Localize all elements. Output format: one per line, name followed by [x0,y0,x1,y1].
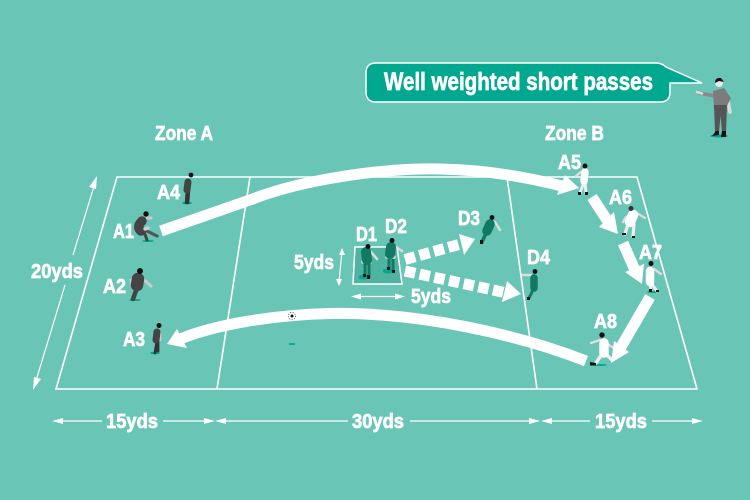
heading: Zone B: Zone B [545,122,604,145]
dimension: 30yds centre [215,410,540,433]
player: A4 [182,173,193,204]
arrow: A6 to A7 [623,243,644,284]
dimension: 15yds zone A: 15yds [106,410,158,433]
arrow: A1 long pass to A5 [161,169,579,231]
player: D1 [358,244,377,280]
player: A8 [590,332,615,366]
label: A7: A7 [639,241,662,264]
icon: ball shadow [288,343,296,345]
grid: 5 by 5 yard defenders box [353,247,402,284]
label: A4: A4 [157,181,181,204]
dimension: 5yds horizontal [351,285,451,308]
icon: coach figure [697,78,731,138]
label: A3: A3 [123,328,145,351]
label: D4: D4 [527,246,551,269]
player: A3 [150,323,162,354]
player: A6 [622,206,645,238]
arrow: A7 to A8 [611,297,650,363]
player: D2 [382,238,402,274]
icon: football [288,312,296,320]
label: D1: D1 [356,223,377,246]
heading: Zone A: Zone A [155,122,213,145]
dimension: 20yds [31,176,97,390]
label: A5: A5 [558,151,581,174]
pitch: outline and zone dividers [56,177,697,389]
player: A7 [647,261,661,293]
dimension: 30yds centre: 30yds [352,410,404,433]
callout: well weighted short passes [366,63,702,102]
dimension: 20yds: 20yds [31,260,83,283]
player: A5 [576,164,588,195]
arrow: A5 to A6 [592,197,618,234]
player: D4 [522,269,537,300]
player: A2 [129,268,151,301]
dimension: 5yds vertical [294,248,345,286]
label: A2: A2 [103,275,126,298]
label: D2: D2 [385,215,407,238]
dimension: 15yds zone B: 15yds [595,410,647,433]
label: D3: D3 [458,207,480,230]
callout: well weighted short passes: Well weighted short passes [384,68,653,96]
dimension: 5yds vertical: 5yds [294,251,334,274]
dimension: 15yds zone A [52,410,215,433]
label: A1: A1 [113,220,134,243]
dimension: 15yds zone B [541,410,703,433]
arrow: A8 long pass back to A3 [167,313,586,361]
arrow: dashed run D2 to D4 [405,271,521,302]
label: A6: A6 [609,186,632,209]
player: D3 [480,215,500,244]
label: A8: A8 [594,310,617,333]
arrow: dashed run D2 to D3 [405,234,475,260]
player: A1 [139,211,157,242]
dimension: 5yds horizontal: 5yds [411,285,451,308]
